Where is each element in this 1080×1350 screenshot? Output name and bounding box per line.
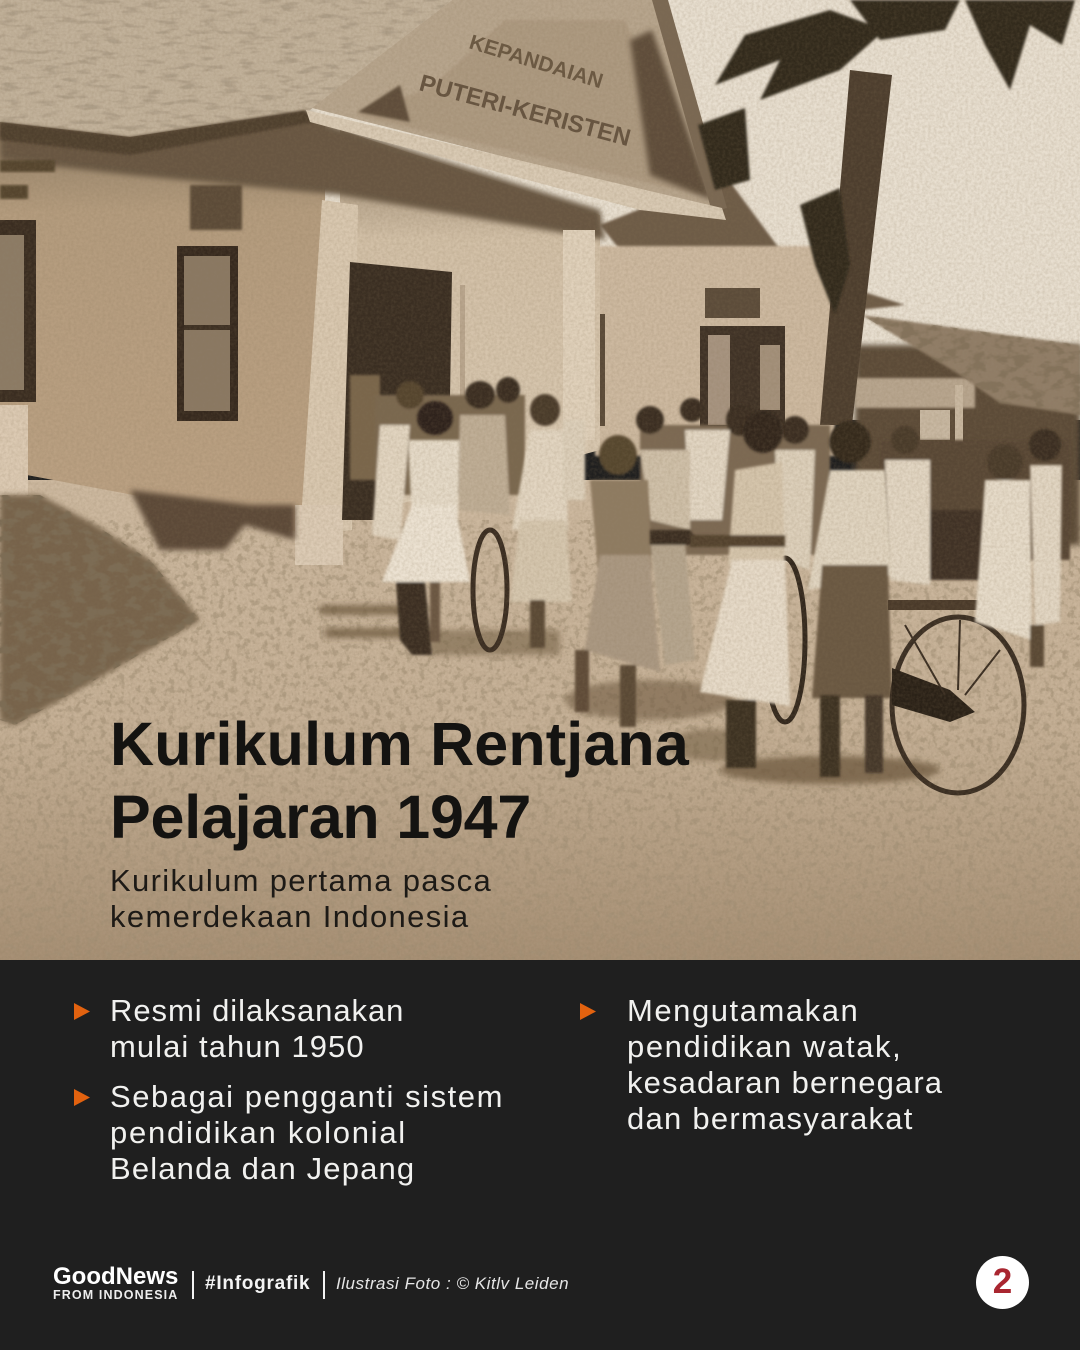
second wing roof and wall [585, 175, 905, 456]
gable with sign [306, 0, 727, 220]
page number badge: 2 [993, 1262, 1012, 1301]
girl in patterned dress [575, 435, 660, 727]
girl in white long dress [690, 411, 790, 768]
footer divider 1 [192, 1271, 194, 1299]
film grain [0, 0, 1080, 960]
subtitle: Kurikulum pertama pasca [110, 863, 492, 898]
text: point 1: mulai tahun 1950 [110, 1029, 365, 1064]
icon: bullet arrow 1 [74, 1003, 90, 1020]
title: Pelajaran 1947 [110, 782, 531, 850]
bicycle with chain guard [888, 600, 1024, 793]
porch columns [295, 200, 595, 565]
footer logo: GoodNews from Indonesia [53, 1263, 178, 1302]
page number badge [976, 1256, 1029, 1309]
text: point 2: Sebagai pengganti sistem [110, 1079, 504, 1114]
footer photo credit: Ilustrasi Foto : © Kitlv Leiden [336, 1274, 569, 1293]
eave shadow [0, 110, 605, 240]
main wall [0, 120, 325, 540]
gable with sign: PUTERI-KERISTEN [416, 70, 633, 152]
text: point 2 [110, 1079, 504, 1186]
footer logo: GoodNews from Indonesia: GoodNews [53, 1263, 178, 1290]
subtitle: kemerdekaan Indonesia [110, 899, 469, 934]
girl in white dress, centre [510, 394, 585, 648]
text: point 3 [627, 993, 943, 1136]
text: point 1 [110, 993, 404, 1064]
sign lettering: KEPANDAIAN [467, 31, 606, 93]
thatched main roof [0, 0, 452, 155]
text: point 1: Resmi dilaksanakan [110, 993, 404, 1028]
text: point 2: Belanda dan Jepang [110, 1151, 415, 1186]
panel: key points [0, 960, 1080, 1350]
bicycle by centre girls [473, 530, 507, 650]
sky [0, 0, 1080, 420]
footer logo: GoodNews from Indonesia: FROM INDONESIA [53, 1288, 178, 1302]
footer hashtag: #Infografik [205, 1273, 310, 1294]
group of students [372, 377, 1070, 793]
text: point 3: dan bermasyarakat [627, 1101, 914, 1136]
icon: bullet arrow 3 [580, 1003, 596, 1020]
back-facing girls at right [975, 429, 1062, 667]
photo: school building with students and bicycles [0, 0, 1080, 960]
text: point 3: Mengutamakan [627, 993, 859, 1028]
girl with dark skirt and bicycle [808, 421, 892, 777]
subtitle [110, 863, 492, 934]
text: point 2: pendidikan kolonial [110, 1115, 407, 1150]
patterned skirt girl [650, 530, 700, 665]
right shed [855, 315, 1080, 545]
title: Kurikulum Rentjana [110, 710, 689, 778]
ground shadows [320, 605, 940, 784]
door [342, 262, 452, 520]
bush lower left [0, 495, 200, 725]
back crowd [372, 377, 1070, 585]
text: point 3: kesadaran bernegara [627, 1065, 943, 1100]
ground [0, 480, 1080, 960]
title [110, 710, 690, 850]
palm tree [698, 0, 1075, 425]
text: point 3: pendidikan watak, [627, 1029, 902, 1064]
icon: bullet arrow 2 [74, 1089, 90, 1106]
footer divider 2 [323, 1271, 325, 1299]
front bicycle wheel [765, 558, 805, 722]
wall base shadow [130, 490, 295, 550]
girl in white skirt, left [382, 401, 470, 655]
left windows [0, 160, 242, 495]
